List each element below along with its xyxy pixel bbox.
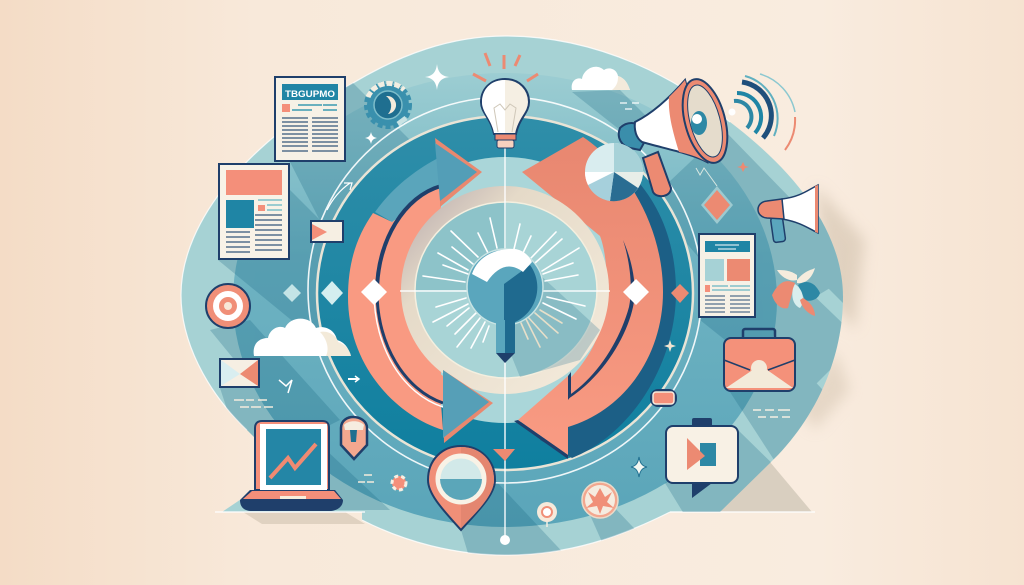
icon: light bulb — [473, 53, 538, 148]
ground shadows on beige — [243, 185, 865, 524]
shaded sun rays — [521, 310, 562, 347]
icon: sparkles — [365, 64, 449, 144]
diamond markers — [283, 279, 689, 305]
icon: laptop — [240, 421, 343, 511]
left salmon arc — [348, 157, 443, 430]
axes — [400, 125, 610, 540]
dark shadow band around right arrow — [540, 150, 676, 458]
icon: small diamond — [696, 168, 733, 224]
node: bottom dot — [500, 535, 510, 545]
icon: large megaphone — [619, 74, 735, 196]
icon: envelope lower — [220, 359, 273, 407]
arrow: small downward triangle — [493, 449, 515, 461]
icon: location pin — [428, 446, 495, 530]
icon: target — [206, 284, 250, 328]
teal arrowhead bottom — [443, 370, 493, 443]
inner disc — [415, 202, 600, 378]
icon: envelope ring — [311, 183, 352, 242]
right salmon arrow — [514, 137, 663, 459]
icon: small badge — [650, 389, 677, 407]
icon: palm leaves — [772, 268, 820, 316]
icon: small target pin — [537, 502, 557, 527]
beige ring — [401, 186, 609, 394]
icon: sparkle lower — [631, 457, 647, 477]
teal arrowhead top — [435, 138, 482, 207]
icon: video card — [666, 418, 738, 498]
long diagonal shadows — [210, 76, 880, 560]
chart: pie disc — [585, 143, 643, 201]
icon: cloud top right — [572, 67, 639, 109]
newspaper: right — [699, 234, 755, 317]
newspaper: top: TBGUPMO — [285, 89, 335, 99]
icon: small gear — [392, 476, 406, 490]
icon: briefcase — [724, 329, 795, 417]
newspaper: left — [219, 164, 289, 259]
icon: gear — [366, 83, 410, 127]
icon: shield — [341, 417, 374, 482]
arrow: small left curve mark — [279, 380, 292, 393]
outer thin ring — [308, 97, 702, 483]
newspaper: top — [275, 77, 345, 161]
icon: signal waves — [728, 74, 795, 150]
icon: cloud lower left — [254, 319, 359, 382]
icon: small star — [664, 340, 676, 352]
icon: small megaphone — [758, 185, 818, 243]
center keyhole pin — [467, 249, 543, 363]
speech-bubble backdrop — [181, 36, 843, 555]
light disc — [371, 157, 639, 423]
icon: small sparkle — [737, 162, 749, 172]
dark teal ring — [317, 116, 693, 470]
sun rays — [423, 218, 585, 348]
icon: floral ornament — [582, 482, 618, 518]
middle ring band — [233, 73, 777, 527]
